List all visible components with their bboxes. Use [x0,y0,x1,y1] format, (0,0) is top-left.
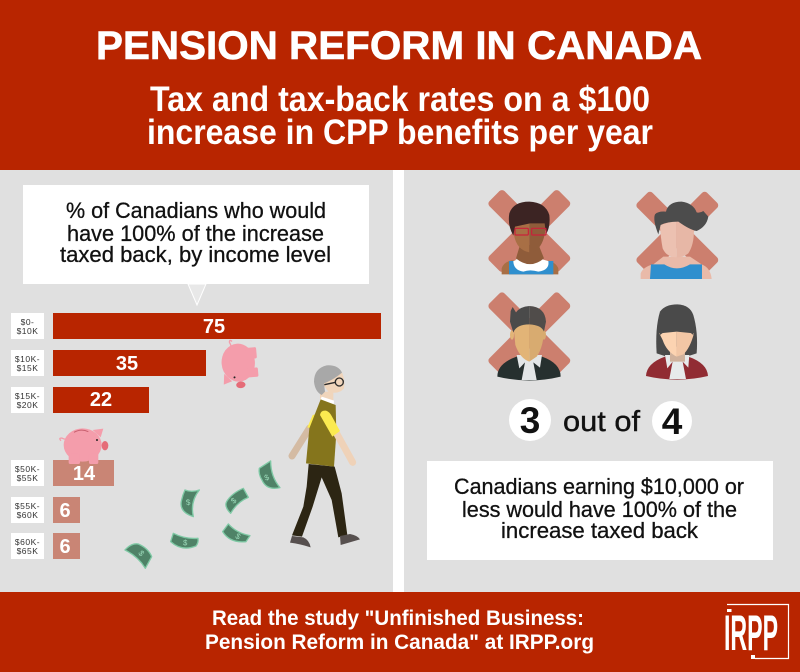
bar: $10K-$15K: 35 [116,353,138,375]
bar: $15K-$20K [11,387,149,413]
callout: chart heading [23,185,369,305]
header banner [0,0,800,170]
icon: crossed-out woman with short hair [635,190,720,279]
title: PENSION REFORM IN CANADA [96,24,702,68]
icon: falling piggy bank [220,338,259,390]
bar: $15K-$20K: 22 [90,389,112,411]
bar: $60K-$65K: $65K [17,546,38,556]
divider [393,170,404,592]
icon: falling banknotes: $ [183,538,188,548]
icon: falling banknotes: $ [136,549,146,558]
bar: $50K-$55K: $55K [17,473,38,483]
callout: conclusion text: less would have 100% of the [462,497,737,522]
bar: $0-$10K [11,313,381,339]
panel: 3 out of 4 [427,189,773,560]
callout: conclusion text [427,461,773,560]
bar: $0-$10K: $0- [21,317,34,327]
icon: falling banknotes [125,461,280,568]
footer text: Read the study "Unfinished Business: [212,607,584,630]
icon: piggy bank on bar [60,428,108,464]
footer banner [0,592,800,672]
icon: falling banknotes: $ [229,496,239,506]
statistic: 3 out of 4: 3 [520,400,540,441]
icon: walking older man [290,365,360,547]
bar: $60K-$65K [11,533,80,559]
bar: $60K-$65K: 6 [59,536,71,558]
callout: chart heading: have 100% of the increase [67,221,324,246]
subtitle: increase in CPP benefits per year [147,113,653,152]
icon: crossed-out man in suit [487,291,572,380]
icon: falling banknotes: $ [263,472,271,483]
callout: chart heading: taxed back, by income level [60,242,331,267]
callout: conclusion text: Canadians earning $10,000 or [454,474,744,499]
callout: chart heading: % of Canadians who would [66,198,326,223]
callout: conclusion text: increase taxed back [501,518,699,543]
icon: crossed-out woman with glasses [487,189,572,274]
bar: $15K-$20K: $20K [17,400,38,410]
panel: income level bar chart [11,185,381,568]
bar: $50K-$55K: 14 [73,463,96,485]
bar: $55K-$60K: 6 [59,500,71,522]
icon group: four Canadians [487,189,720,380]
bar: $55K-$60K [11,497,80,523]
subtitle [147,80,653,152]
statistic: 3 out of 4: 4 [662,401,683,442]
bar: $15K-$20K: $15K- [15,391,40,401]
bar: $55K-$60K: $60K [17,510,38,520]
statistic: 3 out of 4: out of [563,406,641,438]
bar: $10K-$15K: $10K- [15,354,40,364]
bar: $50K-$55K [11,460,114,486]
subtitle: Tax and tax-back rates on a $100 [150,80,650,119]
icon: falling banknotes: $ [185,498,191,507]
bar: $55K-$60K: $55K- [15,501,40,511]
bar: $50K-$55K: $50K- [15,464,40,474]
statistic: 3 out of 4 [509,399,692,442]
bar: $0-$10K: $10K [17,326,38,336]
footer text: Pension Reform in Canada" at IRPP.org [205,631,594,654]
bar: $10K-$15K: $15K [17,363,38,373]
icon: woman in red, not crossed out [646,304,708,380]
bar: $10K-$15K [11,350,206,376]
bar: $60K-$65K: $60K- [15,537,40,547]
bar: $0-$10K: 75 [203,316,225,338]
footer text [205,607,594,654]
icon: falling banknotes: $ [234,531,243,542]
